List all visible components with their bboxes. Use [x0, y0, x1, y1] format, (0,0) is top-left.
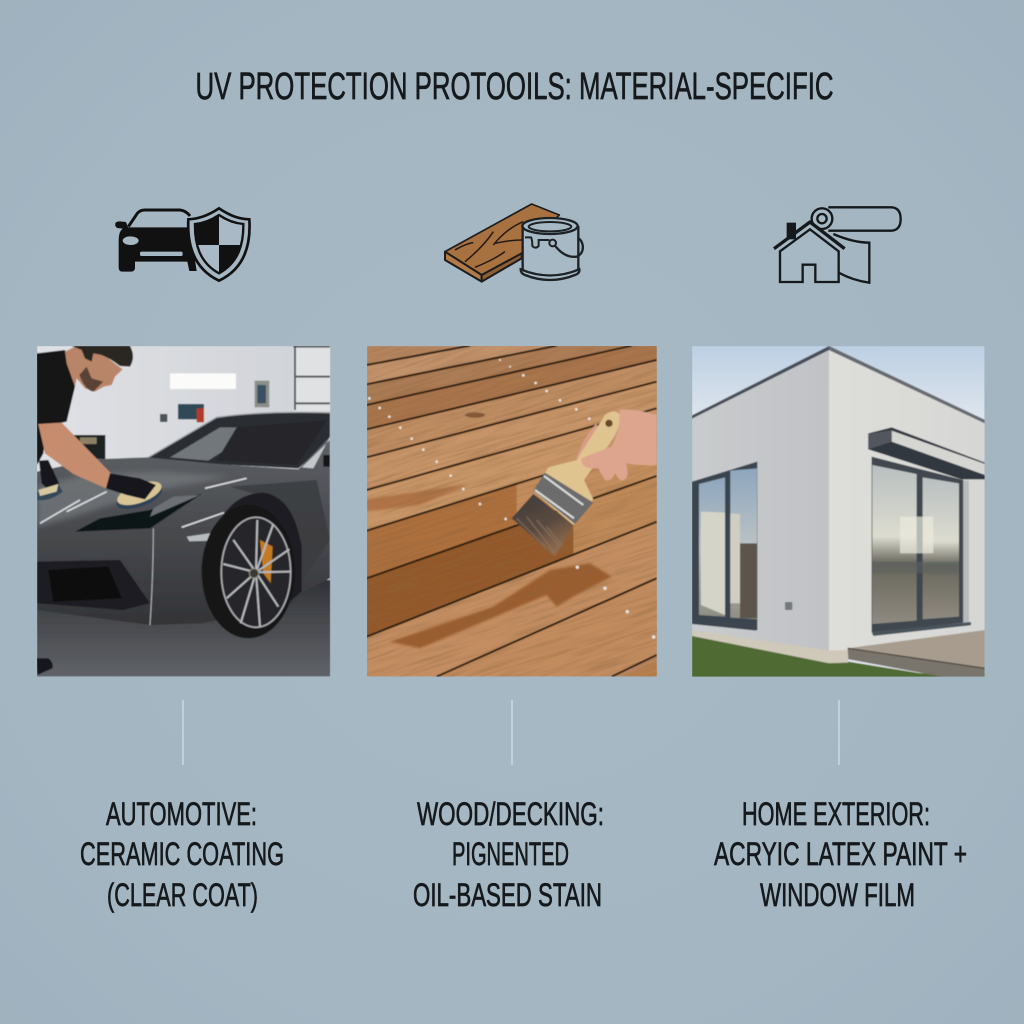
panel: home exterior photo [692, 346, 985, 677]
label: wood decking: OIL-BASED STAIN [413, 877, 602, 913]
right window [872, 457, 963, 633]
wet stain patches [367, 484, 470, 512]
divider: home [838, 700, 840, 765]
label: automotive: CERAMIC COATING [80, 836, 284, 872]
brush and hand [577, 423, 600, 458]
grass, plinth and deck [920, 672, 984, 677]
car windshield and roof [145, 412, 330, 468]
left window [692, 462, 757, 630]
divider: wood [512, 700, 513, 765]
label: home exterior: HOME EXTERIOR: [742, 796, 930, 832]
label: wood decking: PIGNENTED [452, 836, 569, 872]
label: home exterior: WINDOW FILM [760, 877, 915, 913]
icon: wood plank with paint can [445, 204, 583, 282]
right wall [829, 349, 985, 652]
icon: car with shield [115, 208, 250, 281]
label: automotive [80, 796, 284, 913]
icon: house with window film roll [774, 207, 901, 283]
label: automotive: AUTOMOTIVE: [106, 796, 257, 832]
left wall [692, 349, 829, 652]
deck gaps [367, 346, 657, 677]
car body [37, 437, 330, 625]
label: automotive: (CLEAR COAT) [107, 877, 258, 913]
divider: automotive [182, 700, 184, 765]
panel: wood decking photo [367, 346, 657, 677]
car wheel [224, 492, 302, 600]
panel: automotive photo [37, 345, 331, 677]
detailer person [37, 350, 75, 465]
label: wood decking: WOOD/DECKING: [417, 796, 604, 832]
deck planks [367, 346, 557, 384]
label: wood decking [413, 796, 604, 913]
awning [868, 427, 985, 479]
wood grain [367, 346, 657, 676]
label: home exterior [714, 796, 967, 913]
